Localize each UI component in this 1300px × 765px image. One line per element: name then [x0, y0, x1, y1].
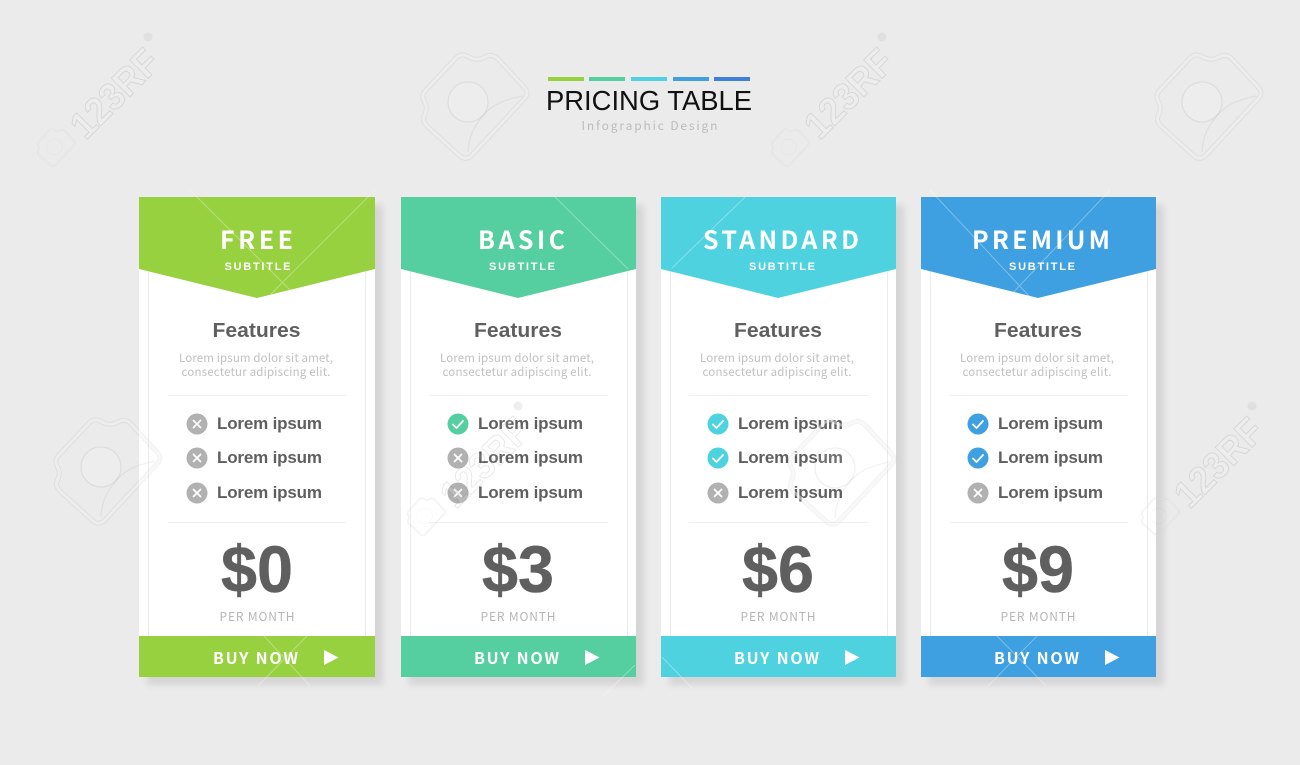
watermark: 123RF over basic plan — [408, 402, 538, 535]
watermark: 123RF lower right — [1142, 402, 1272, 535]
panel: free plan — [139, 197, 383, 685]
price: $0 — [221, 532, 293, 606]
buy button: BUY NOW — [474, 645, 559, 669]
buy button: BUY NOW — [734, 645, 819, 669]
feature row 2: Lorem ipsum — [217, 448, 322, 467]
subtitle: SUBTITLE — [224, 261, 290, 273]
heading: PRICING TABLE — [546, 85, 752, 116]
watermark: 123RF top left: 123RF — [62, 41, 168, 147]
watermark: egg top right — [1157, 55, 1261, 158]
header banner — [921, 197, 1156, 298]
feature row 3: Lorem ipsum — [738, 483, 843, 502]
panel: basic plan — [401, 197, 644, 685]
features heading: Features — [734, 320, 822, 342]
feature row 1: Lorem ipsum — [998, 414, 1103, 433]
feature row 2: Lorem ipsum — [738, 448, 843, 467]
price: $3 — [482, 532, 554, 606]
plan name: PREMIUM — [972, 221, 1110, 257]
description: consectetur adipiscing elit. — [962, 364, 1112, 380]
subtitle: SUBTITLE — [489, 261, 555, 273]
watermark: 123RF top left — [38, 32, 168, 166]
description: consectetur adipiscing elit. — [442, 364, 592, 380]
plan name: STANDARD — [703, 221, 859, 257]
buy button — [661, 636, 896, 677]
price: $6 — [742, 532, 814, 606]
feature row 3: Lorem ipsum — [998, 483, 1103, 502]
colour bars — [548, 77, 750, 81]
feature row 3: Lorem ipsum — [217, 483, 322, 502]
feature row 1: Lorem ipsum — [478, 414, 583, 433]
per month: PER MONTH — [220, 608, 294, 625]
watermark: 123RF top centre: 123RF — [796, 41, 902, 147]
per month: PER MONTH — [740, 608, 816, 625]
panel: premium plan — [921, 197, 1164, 685]
watermark: egg lower left — [56, 420, 160, 523]
feature row 1: Lorem ipsum — [217, 414, 322, 433]
plan name: BASIC — [478, 221, 565, 257]
features heading: Features — [212, 320, 300, 342]
watermark: diagonal hairlines — [190, 190, 1110, 696]
buy button — [921, 636, 1156, 677]
header banner — [661, 197, 896, 298]
buy button: BUY NOW — [994, 645, 1079, 669]
watermark: 123RF over basic plan: 123RF — [432, 410, 538, 516]
description: Lorem ipsum dolor sit amet, — [179, 350, 333, 366]
price: $9 — [1002, 532, 1074, 606]
per month: PER MONTH — [1000, 608, 1076, 625]
features heading: Features — [474, 320, 562, 342]
features heading: Features — [994, 320, 1082, 342]
description: Lorem ipsum dolor sit amet, — [700, 350, 854, 366]
description: consectetur adipiscing elit. — [702, 364, 852, 380]
watermark: egg over standard plan — [790, 421, 894, 524]
subheading: Infographic Design — [582, 117, 718, 134]
description: Lorem ipsum dolor sit amet, — [960, 350, 1114, 366]
buy button — [401, 636, 636, 677]
watermark: 123RF top centre — [772, 32, 902, 166]
feature row 2: Lorem ipsum — [998, 448, 1103, 467]
buy button — [139, 636, 375, 677]
plan name: FREE — [220, 221, 293, 257]
feature row 2: Lorem ipsum — [478, 448, 583, 467]
buy button: BUY NOW — [213, 645, 298, 669]
watermark: egg top centre — [423, 55, 527, 158]
feature row 3: Lorem ipsum — [478, 483, 583, 502]
header banner — [401, 197, 636, 298]
panel: standard plan — [661, 197, 904, 685]
subtitle: SUBTITLE — [1009, 261, 1075, 273]
description: Lorem ipsum dolor sit amet, — [440, 350, 594, 366]
header banner — [139, 197, 375, 298]
per month: PER MONTH — [480, 608, 556, 625]
description: consectetur adipiscing elit. — [182, 364, 330, 380]
subtitle: SUBTITLE — [749, 261, 815, 273]
title block — [546, 77, 752, 134]
feature row 1: Lorem ipsum — [738, 414, 843, 433]
watermark: 123RF lower right: 123RF — [1166, 410, 1272, 516]
